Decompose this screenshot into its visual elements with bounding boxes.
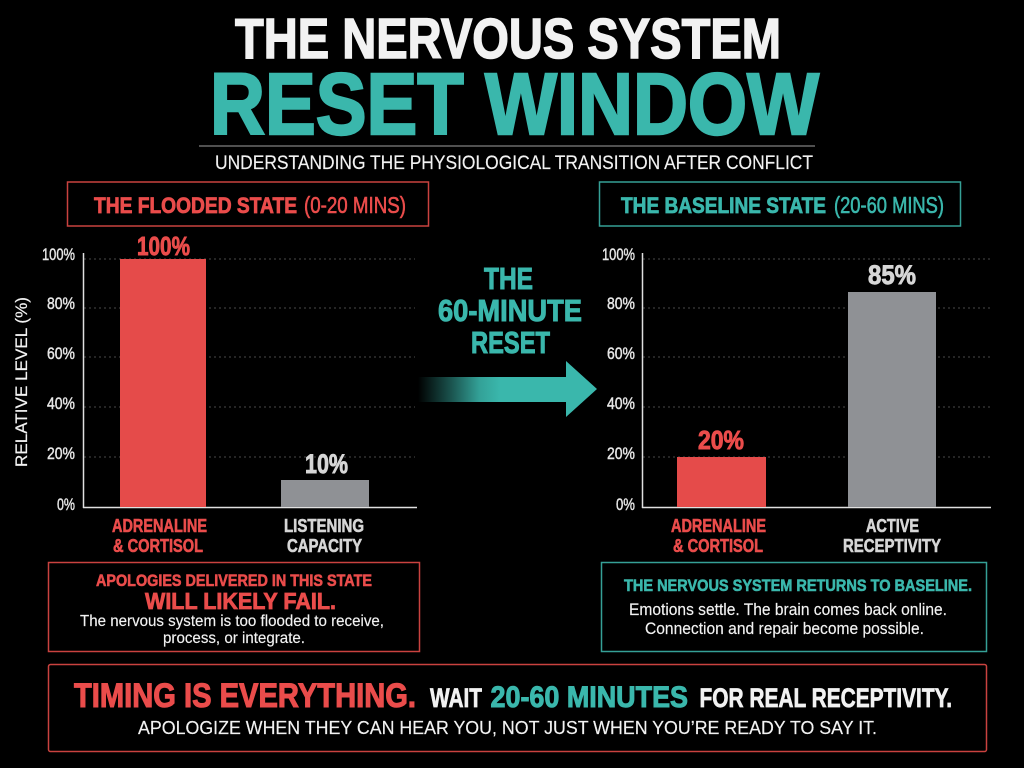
bar chart: baseline state (602, 245, 991, 556)
callout: baseline return: THE NERVOUS SYSTEM RETURNS TO BASELINE. (624, 576, 972, 595)
y axis labels: 0% (616, 495, 635, 514)
callout: flooded warning: The nervous system is too flooded to receive, (80, 613, 384, 630)
callout: baseline return: Connection and repair become possible. (645, 620, 924, 638)
y axis labels: 20% (47, 444, 75, 463)
callout: flooded warning: WILL LIKELY FAIL. (145, 588, 336, 614)
y axis labels (42, 245, 75, 514)
label: active receptivity: ACTIVE (866, 516, 919, 536)
subtitle: UNDERSTANDING THE PHYSIOLOGICAL TRANSITION AFTER CONFLICT (215, 153, 813, 174)
reset label: THE (484, 261, 533, 296)
callout: baseline return: Emotions settle. The brain comes back online. (629, 601, 947, 619)
bar: adrenaline 20% (677, 425, 766, 507)
reset label: 60-MINUTE (438, 293, 582, 328)
y axis labels: 80% (607, 294, 635, 313)
bar: adrenaline 100% (120, 231, 206, 507)
banner: timing takeaway: 20-60 MINUTES (490, 681, 688, 714)
bar: adrenaline 100%: 100% (137, 231, 190, 261)
label: adrenaline: ADRENALINE (112, 516, 207, 536)
label: adrenaline (112, 516, 207, 556)
label: listening capacity: CAPACITY (287, 536, 362, 556)
callout: flooded warning: APOLOGIES DELIVERED IN THIS STATE (96, 571, 372, 590)
y axis labels: 80% (47, 294, 75, 313)
banner: timing takeaway (48, 664, 986, 752)
bar: active receptivity 85%: 85% (868, 260, 916, 290)
label: active receptivity (843, 516, 941, 556)
title: THE NERVOUS SYSTEM (235, 7, 781, 71)
arrow (418, 361, 597, 417)
label: adrenaline: & CORTISOL (113, 536, 203, 556)
panel heading: baseline state (600, 182, 960, 226)
label: listening capacity: LISTENING (284, 516, 364, 536)
title (210, 7, 820, 153)
callout: baseline return (602, 562, 986, 652)
y axis labels: 0% (57, 495, 75, 514)
label: active receptivity: RECEPTIVITY (843, 536, 941, 556)
panel heading: baseline state: (20-60 MINS) (834, 192, 944, 218)
banner: timing takeaway: WAIT (430, 683, 482, 713)
axis title: RELATIVE LEVEL (%) (12, 297, 31, 467)
y axis labels: 20% (607, 444, 635, 463)
y axis labels (602, 245, 635, 514)
panel heading: flooded state: (0-20 MINS) (304, 192, 406, 218)
bar: listening 10% (281, 449, 369, 507)
label: adrenaline: ADRENALINE (671, 516, 766, 536)
title: RESET WINDOW (210, 56, 820, 153)
panel heading: flooded state (68, 182, 428, 226)
bar: listening 10%: 10% (305, 449, 348, 479)
reset label: RESET (471, 325, 550, 360)
y axis labels: 100% (602, 245, 635, 264)
reset label (438, 261, 582, 360)
callout: flooded warning (48, 562, 420, 652)
y axis labels: 100% (42, 245, 75, 264)
panel heading: baseline state: THE BASELINE STATE (621, 193, 826, 218)
bar: adrenaline 20%: 20% (698, 425, 744, 455)
banner: timing takeaway: TIMING IS EVERYTHING. (74, 677, 416, 715)
callout: flooded warning: process, or integrate. (163, 630, 305, 647)
y axis labels: 60% (607, 344, 635, 363)
y axis labels: 40% (47, 394, 75, 413)
banner: timing takeaway: APOLOGIZE WHEN THEY CAN HEAR YOU, NOT JUST WHEN YOU’RE READY TO SAY IT. (138, 717, 877, 738)
bar chart: flooded state (12, 231, 417, 556)
bar: active receptivity 85% (848, 260, 936, 507)
label: listening capacity (284, 516, 364, 556)
banner: timing takeaway: FOR REAL RECEPTIVITY. (700, 683, 952, 713)
y axis labels: 40% (607, 394, 635, 413)
label: adrenaline (671, 516, 766, 556)
panel heading: flooded state: THE FLOODED STATE (94, 193, 297, 218)
y axis labels: 60% (47, 344, 75, 363)
label: adrenaline: & CORTISOL (673, 536, 763, 556)
